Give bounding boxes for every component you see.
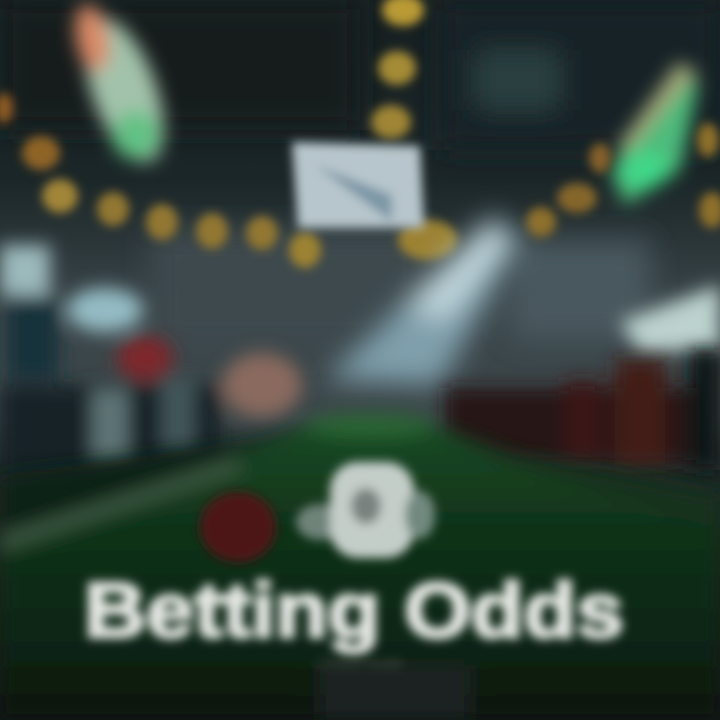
left crowd: [0, 245, 302, 480]
upper stands: [0, 0, 720, 350]
central sign: [292, 142, 424, 228]
right stand seating: [445, 350, 720, 470]
floodlight beam: [325, 215, 520, 385]
right roof: [620, 285, 720, 352]
title: Betting Odds: [84, 566, 624, 654]
subtitle: Cricket Guide: [318, 655, 403, 671]
left flag: [68, 2, 180, 172]
cricket ball: [200, 492, 276, 562]
cricket pitch: [0, 413, 720, 720]
odds icon: [296, 462, 435, 558]
string lights: [0, 0, 720, 268]
right flag: [610, 62, 698, 205]
